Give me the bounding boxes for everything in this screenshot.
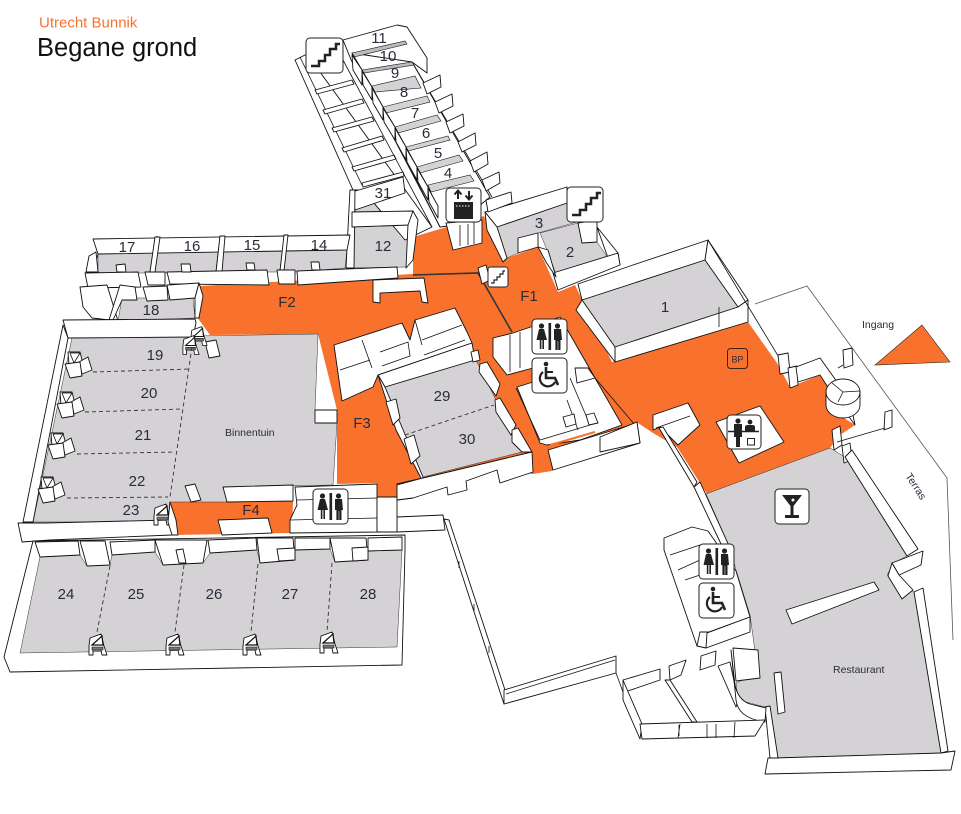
icon: reception	[727, 415, 761, 449]
icon: toilets central	[532, 319, 567, 354]
labels: room numbers: 7	[411, 105, 419, 122]
room: restaurant floor	[706, 448, 941, 758]
labels: room numbers: 14	[311, 237, 327, 254]
labels: room numbers: 22	[129, 473, 145, 490]
walls: rooms 3 and 2	[485, 187, 620, 290]
labels: room numbers: 1	[661, 299, 669, 316]
labels: room numbers: 4	[444, 165, 452, 182]
walls: lift shaft dividers	[460, 222, 474, 246]
labels: room numbers: 26	[206, 586, 222, 603]
label: garden: Binnentuin	[225, 427, 275, 439]
walls: Binnentuin west block	[18, 319, 337, 542]
walls: rooms 24 to 28	[4, 535, 405, 672]
labels: room numbers: 15	[244, 237, 260, 254]
label: entrance: Ingang	[862, 319, 894, 331]
panel: orange circulation floor	[170, 216, 855, 535]
walls: south-east corridor storage	[600, 403, 730, 548]
labels: room numbers: 28	[360, 586, 376, 603]
walls: rooms 4 to 11 block	[343, 25, 512, 227]
reception desk	[716, 406, 784, 463]
labels: corridor names: F3	[353, 415, 371, 432]
labels: room numbers: 20	[141, 385, 157, 402]
icon: stairs top-left	[306, 38, 343, 73]
revolving door	[826, 379, 860, 418]
doors: rooms 19 to 22	[38, 352, 92, 503]
walls: rooms north of 29	[334, 308, 472, 401]
labels: corridor names	[242, 288, 538, 519]
icon: wheelchair central	[532, 358, 567, 393]
labels: room numbers: 27	[282, 586, 298, 603]
labels: room numbers: 12	[375, 238, 391, 255]
labels: room numbers: 24	[58, 586, 74, 603]
icon: stairs right	[567, 187, 603, 222]
stair connector block	[478, 265, 490, 284]
walls: south-west service rooms	[623, 648, 766, 739]
labels: room numbers: 3	[535, 215, 543, 232]
dashed partition: rooms 29 and 30	[405, 405, 494, 435]
labels: room numbers: 9	[391, 65, 399, 82]
walls: left wing offices	[295, 54, 432, 240]
room: 2 floor	[540, 223, 608, 277]
door: room 23 entrance	[154, 504, 172, 525]
dashed partitions: rooms 24 to 28	[97, 563, 332, 632]
labels: corridor names: F1	[520, 288, 538, 305]
labels: corridor names: F4	[242, 502, 260, 519]
icon: cocktail bar	[775, 489, 809, 524]
room: 29 and 30 floor	[385, 360, 522, 477]
room: 18 floor	[118, 298, 195, 321]
labels: room numbers: 16	[184, 238, 200, 255]
room: 24 to 28 floor	[20, 549, 402, 653]
walls: rooms 29 and 30	[378, 343, 533, 500]
icon: small stairs	[488, 267, 508, 287]
walls: F4 corridor	[168, 478, 445, 535]
room: 12 floor	[347, 225, 410, 268]
icon: wheelchair restaurant	[699, 583, 734, 618]
walls: restaurant	[765, 450, 955, 774]
labels: room numbers: 10	[380, 48, 396, 65]
room: 3 floor	[497, 203, 577, 258]
walls: rooms 14 to 17	[85, 235, 398, 288]
doors: rooms 24 to 28	[89, 632, 338, 655]
walls: central toilet block	[493, 317, 640, 470]
walls: glazed line between F1 and F2	[413, 273, 512, 332]
walls: room 18	[80, 283, 203, 321]
icon: BP parking sign	[728, 348, 748, 368]
labels: room numbers	[58, 30, 669, 603]
walls: F2 partition	[373, 278, 428, 303]
labels: room numbers: 29	[434, 388, 450, 405]
icon: BP parking sign: BP	[731, 354, 744, 364]
labels: corridor names: F2	[278, 294, 296, 311]
room: 1 floor	[582, 260, 738, 347]
label: terrace: Terras	[902, 471, 928, 502]
walls: room 31 and 12	[346, 177, 418, 268]
labels: room numbers: 6	[422, 125, 430, 142]
title: floor name: Begane grond	[37, 34, 197, 62]
labels: room numbers: 5	[434, 145, 442, 162]
labels: room numbers: 30	[459, 431, 475, 448]
walls: room 1	[576, 240, 783, 364]
icon: entrance triangle	[875, 325, 950, 365]
labels: room numbers: 11	[371, 30, 387, 47]
label: restaurant: Restaurant	[833, 664, 884, 676]
labels: room numbers: 31	[375, 185, 391, 202]
terrace boundary line	[755, 286, 953, 640]
door: room 19 entrance	[183, 327, 207, 354]
dashed partitions: rooms 19 to 23	[67, 347, 192, 498]
room: Binnentuin and rooms 19 to 23 floor	[33, 334, 337, 522]
labels: room numbers: 8	[400, 84, 408, 101]
labels: room numbers: 19	[147, 347, 163, 364]
labels: room numbers: 2	[566, 244, 574, 261]
title: location: Utrecht Bunnik	[39, 14, 138, 32]
labels: room numbers: 21	[135, 427, 151, 444]
room: 17 to 14 floors	[98, 250, 347, 273]
labels: room numbers: 17	[119, 239, 135, 256]
walls: lift shaft	[446, 220, 482, 250]
room: 31 floor	[355, 193, 415, 220]
icon: toilets south	[313, 489, 348, 524]
labels: room numbers: 18	[143, 302, 159, 319]
labels: room numbers: 23	[123, 502, 139, 519]
entrance walls	[778, 348, 892, 463]
icon: toilets restaurant	[699, 544, 734, 579]
icon: lift	[446, 188, 481, 222]
walls: long south courtyard wall	[444, 519, 623, 704]
labels: room numbers: 25	[128, 586, 144, 603]
walls: restaurant toilet block	[664, 527, 750, 648]
